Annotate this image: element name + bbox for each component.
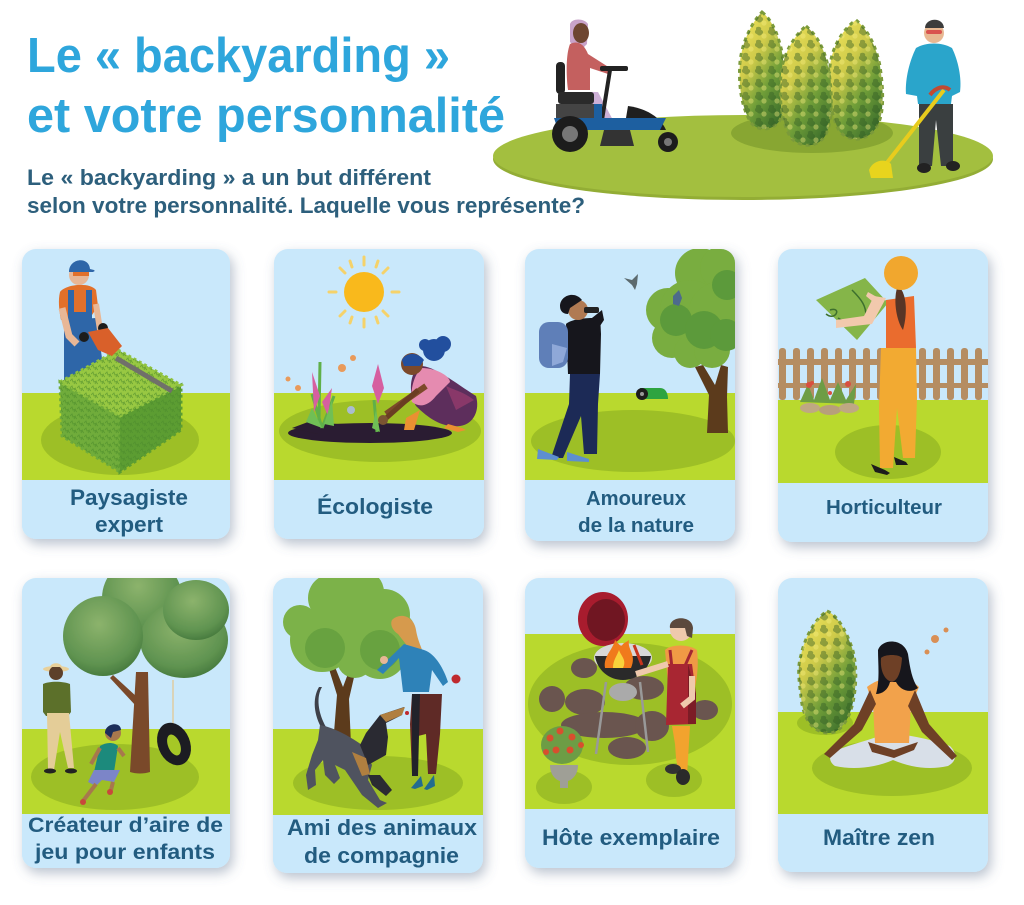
label: Maître zen <box>823 825 935 850</box>
icon: gardener <box>59 260 108 382</box>
label: Ami des animaux <box>287 815 478 840</box>
label: Amoureux <box>586 487 687 510</box>
icon: stepping stones <box>539 658 718 759</box>
icon: woman with apple <box>377 616 460 790</box>
icon: flower bed <box>800 378 859 415</box>
title: et votre personnalité <box>27 89 505 143</box>
icon: birds <box>624 274 682 306</box>
label: Horticulteur <box>826 496 942 519</box>
label: Créateur d’aire de <box>28 813 223 837</box>
icon: tree <box>283 570 415 745</box>
label: Paysagiste <box>70 485 188 510</box>
lawn <box>493 113 993 200</box>
panel: Créateur d'aire de jeu pour enfants <box>22 558 230 869</box>
title: Le « backyarding » <box>27 29 450 83</box>
label: de la nature <box>578 514 694 537</box>
icon: dog <box>306 687 409 808</box>
header illustration: lawn, mower, bushes, gardener <box>493 12 993 200</box>
subtitle: Le « backyarding » a un but différent <box>27 165 432 190</box>
icon: barbecue <box>578 592 652 754</box>
icon: map <box>816 278 888 340</box>
icon: hedge cube <box>60 350 181 472</box>
icon: running boy <box>80 724 124 805</box>
icon: meditating woman <box>824 641 957 768</box>
icon: birdwatcher <box>537 295 604 462</box>
label: Hôte exemplaire <box>542 825 720 850</box>
label <box>28 813 223 864</box>
icon: man with trimmer <box>869 20 961 178</box>
label <box>287 815 478 868</box>
icon: butterflies <box>924 628 948 654</box>
icon: bush <box>799 611 856 733</box>
label: de compagnie <box>304 843 459 868</box>
icon: three bushes <box>740 12 883 145</box>
icon: sun <box>329 257 399 327</box>
label: Écologiste <box>317 494 433 519</box>
icon: kneeling woman <box>378 336 477 432</box>
icon: woman on riding mower <box>552 20 678 152</box>
title <box>27 29 505 143</box>
subtitle: selon votre personnalité. Laquelle vous représente? <box>27 193 585 218</box>
icon: man with apron <box>636 618 698 785</box>
icon: man in hat <box>43 663 77 774</box>
panel: Maître zen <box>778 578 988 874</box>
fence <box>778 348 988 400</box>
label: jeu pour enfants <box>34 840 215 864</box>
panel: Horticulteur <box>778 249 988 543</box>
panel: Hôte exemplaire <box>525 578 735 869</box>
icon: robot mower <box>636 388 668 400</box>
subtitle <box>27 165 585 218</box>
label <box>70 485 188 537</box>
icon: flowers <box>286 355 384 432</box>
icon: woman with map <box>836 256 918 475</box>
panel: Amoureux de la nature <box>525 246 756 542</box>
label: expert <box>95 512 164 537</box>
panel: Ami des animaux de compagnie <box>273 570 483 875</box>
label <box>578 487 694 537</box>
icon: tree with tire swing <box>63 558 229 774</box>
icon: flower pot <box>541 726 584 788</box>
icon: tree <box>646 249 735 433</box>
panel: Paysagiste expert <box>22 249 230 540</box>
icon: soil bed <box>288 422 452 443</box>
panel: Écologiste <box>274 249 484 540</box>
icon: hedge trimmer <box>88 328 172 391</box>
